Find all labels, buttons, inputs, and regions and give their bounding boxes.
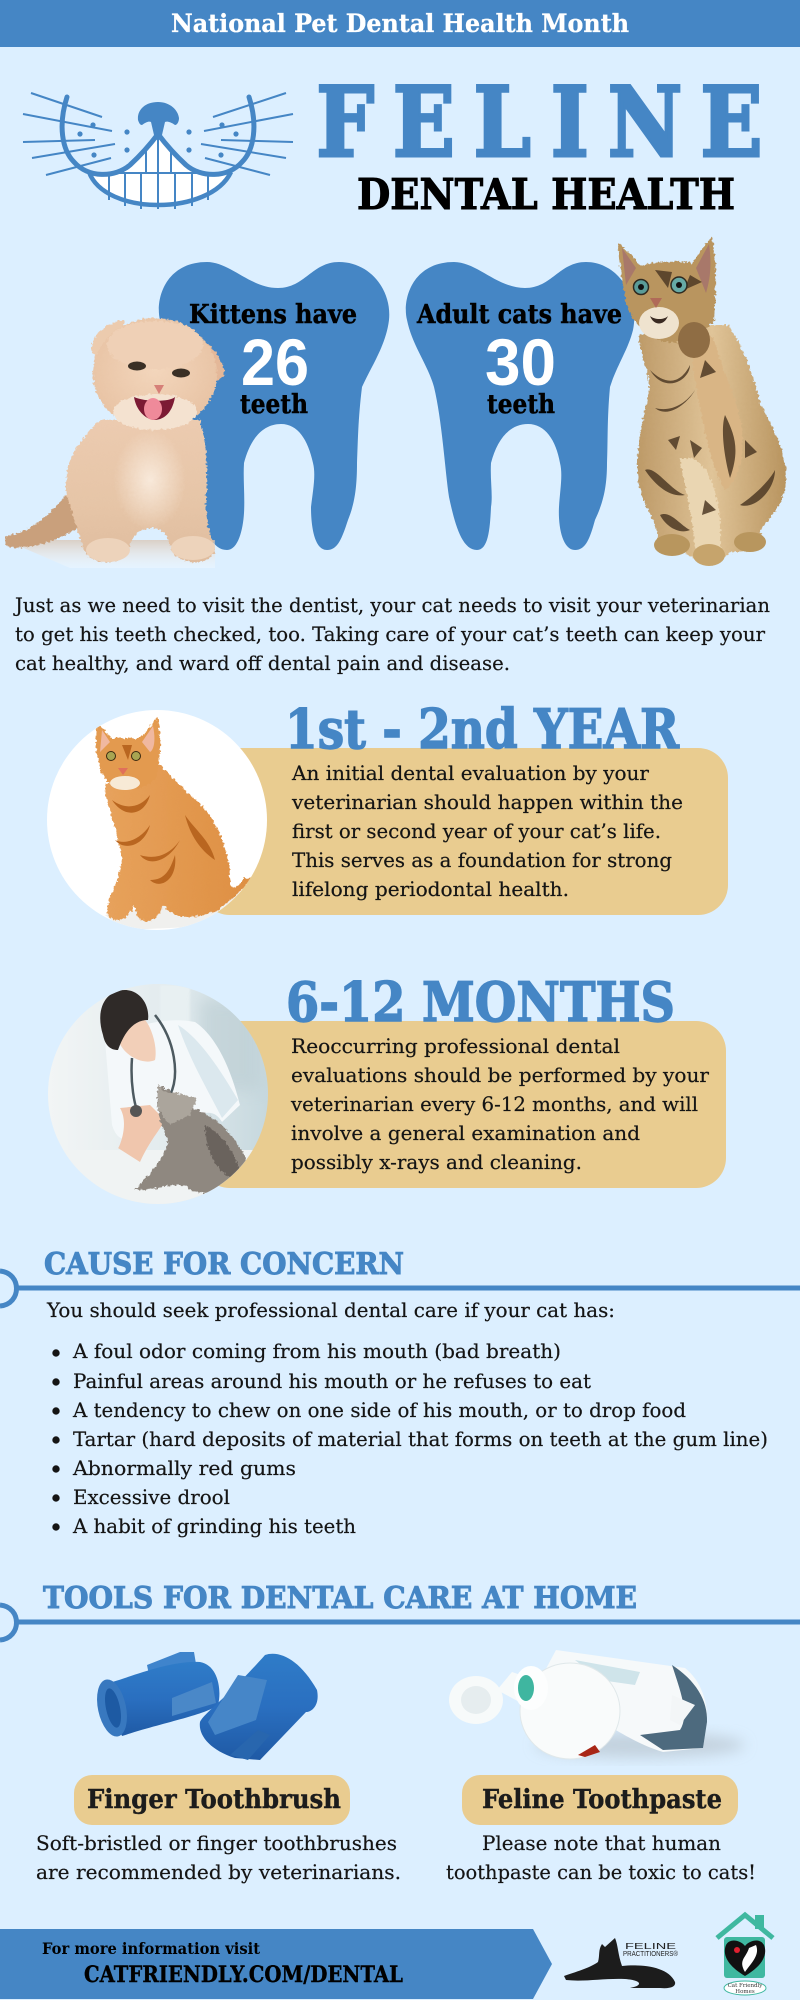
label: teeth: teeth bbox=[240, 390, 308, 420]
list: symptoms: A tendency to chew on one side of his mouth, or to drop food bbox=[72, 1398, 686, 1422]
card: finger toothbrush bbox=[36, 1775, 401, 1884]
text: first year description: first or second year of your cat’s life. bbox=[292, 819, 661, 843]
list: symptoms: A foul odor coming from his mouth (bad breath) bbox=[72, 1339, 561, 1363]
heading: cause for concern: CAUSE FOR CONCERN bbox=[44, 1247, 404, 1282]
label: kittens have: Kittens have bbox=[189, 300, 357, 330]
text: toothbrush description: are recommended by veterinarians. bbox=[36, 1860, 401, 1884]
text: first year description: veterinarian should happen within the bbox=[291, 790, 683, 814]
intro paragraph: Just as we need to visit the dentist, your cat needs to visit your veterinarian bbox=[13, 593, 770, 617]
list: symptoms: A habit of grinding his teeth bbox=[72, 1514, 356, 1538]
text: six to twelve month description: evaluations should be performed by your bbox=[291, 1063, 709, 1087]
label: teeth: teeth bbox=[487, 390, 555, 420]
heading: tools for dental care: TOOLS FOR DENTAL CARE AT HOME bbox=[43, 1581, 637, 1616]
text: more information: For more information visit bbox=[42, 1939, 261, 1958]
label: feline toothpaste: Feline Toothpaste bbox=[482, 1785, 722, 1815]
logo: cat friendly homes bbox=[717, 1915, 773, 1995]
icon: toothpaste tube bbox=[449, 1650, 745, 1759]
intro paragraph bbox=[13, 593, 770, 675]
text: first year description: An initial dental evaluation by your bbox=[291, 761, 649, 785]
image: vet examining cat in circle bbox=[48, 984, 268, 1210]
list: symptoms: Painful areas around his mouth or he refuses to eat bbox=[73, 1369, 591, 1393]
list: symptoms bbox=[52, 1339, 768, 1538]
number: 30: 30 bbox=[485, 325, 556, 399]
text: url: CATFRIENDLY.COM/DENTAL bbox=[84, 1962, 403, 1988]
image: kitten bbox=[5, 318, 224, 568]
text: lead in: You should seek professional dental care if your cat has: bbox=[46, 1298, 615, 1322]
icon: finger toothbrushes bbox=[92, 1652, 318, 1760]
text: first year description bbox=[291, 761, 683, 901]
text: six to twelve month description: involve a general examination and bbox=[291, 1121, 640, 1145]
text: toothpaste description: Please note that human bbox=[482, 1831, 721, 1855]
logo: american association of feline practitioners: PRACTITIONERS® bbox=[623, 1949, 678, 1958]
list: symptoms: Tartar (hard deposits of material that forms on teeth at the gum line) bbox=[73, 1427, 768, 1451]
heading: 1st - 2nd year: 1st - 2nd YEAR bbox=[285, 697, 680, 761]
panel: 1st - 2nd year bbox=[47, 697, 728, 930]
list: symptoms: Excessive drool bbox=[73, 1485, 230, 1509]
text: six to twelve month description: possibly x-rays and cleaning. bbox=[291, 1150, 582, 1174]
text: toothpaste description: toothpaste can be toxic to cats! bbox=[446, 1860, 756, 1884]
image: orange cat in circle bbox=[47, 710, 267, 930]
heading: 6-12 months: 6-12 MONTHS bbox=[286, 970, 675, 1034]
text: first year description: This serves as a foundation for strong bbox=[292, 848, 672, 872]
text: toothbrush description bbox=[36, 1831, 401, 1884]
section: cause for concern bbox=[0, 1247, 800, 1538]
number: 26: 26 bbox=[241, 325, 309, 399]
text: six to twelve month description bbox=[290, 1034, 709, 1174]
logo: american association of feline practitioners bbox=[564, 1938, 678, 1988]
icon: smiling cat face logo bbox=[23, 93, 293, 209]
panel: 6-12 months bbox=[48, 970, 726, 1210]
text: first year description: lifelong periodontal health. bbox=[292, 877, 569, 901]
intro paragraph: to get his teeth checked, too. Taking care of your cat’s teeth can keep your bbox=[15, 622, 765, 646]
section: tools for dental care at home bbox=[0, 1581, 800, 1884]
title: FELINE: FELINE bbox=[316, 67, 763, 180]
intro paragraph: cat healthy, and ward off dental pain and disease. bbox=[15, 651, 510, 675]
logo: cat friendly homes: Cat Friendly bbox=[728, 1983, 763, 1989]
text: toothbrush description: Soft-bristled or finger toothbrushes bbox=[36, 1831, 397, 1855]
label: finger toothbrush: Finger Toothbrush bbox=[87, 1785, 341, 1815]
text: six to twelve month description: Reoccurring professional dental bbox=[291, 1034, 620, 1058]
text: six to twelve month description: veterinarian every 6-12 months, and will bbox=[290, 1092, 698, 1116]
logo: american association of feline practitioners: FELINE bbox=[625, 1942, 676, 1951]
logo: cat friendly homes: Homes bbox=[735, 1989, 755, 1995]
card: feline toothpaste bbox=[446, 1775, 756, 1884]
text: toothpaste description bbox=[446, 1831, 756, 1884]
image: bengal cat bbox=[618, 236, 786, 566]
banner title: National Pet Dental Health Month bbox=[171, 9, 629, 38]
adult cat tooth bbox=[406, 262, 634, 550]
label: adult cats have: Adult cats have bbox=[416, 300, 622, 330]
footer banner arrow bbox=[0, 1929, 552, 1999]
top banner bbox=[0, 0, 800, 47]
kitten tooth bbox=[159, 262, 389, 550]
list: symptoms: Abnormally red gums bbox=[72, 1456, 296, 1480]
subtitle: DENTAL HEALTH: DENTAL HEALTH bbox=[357, 170, 735, 219]
